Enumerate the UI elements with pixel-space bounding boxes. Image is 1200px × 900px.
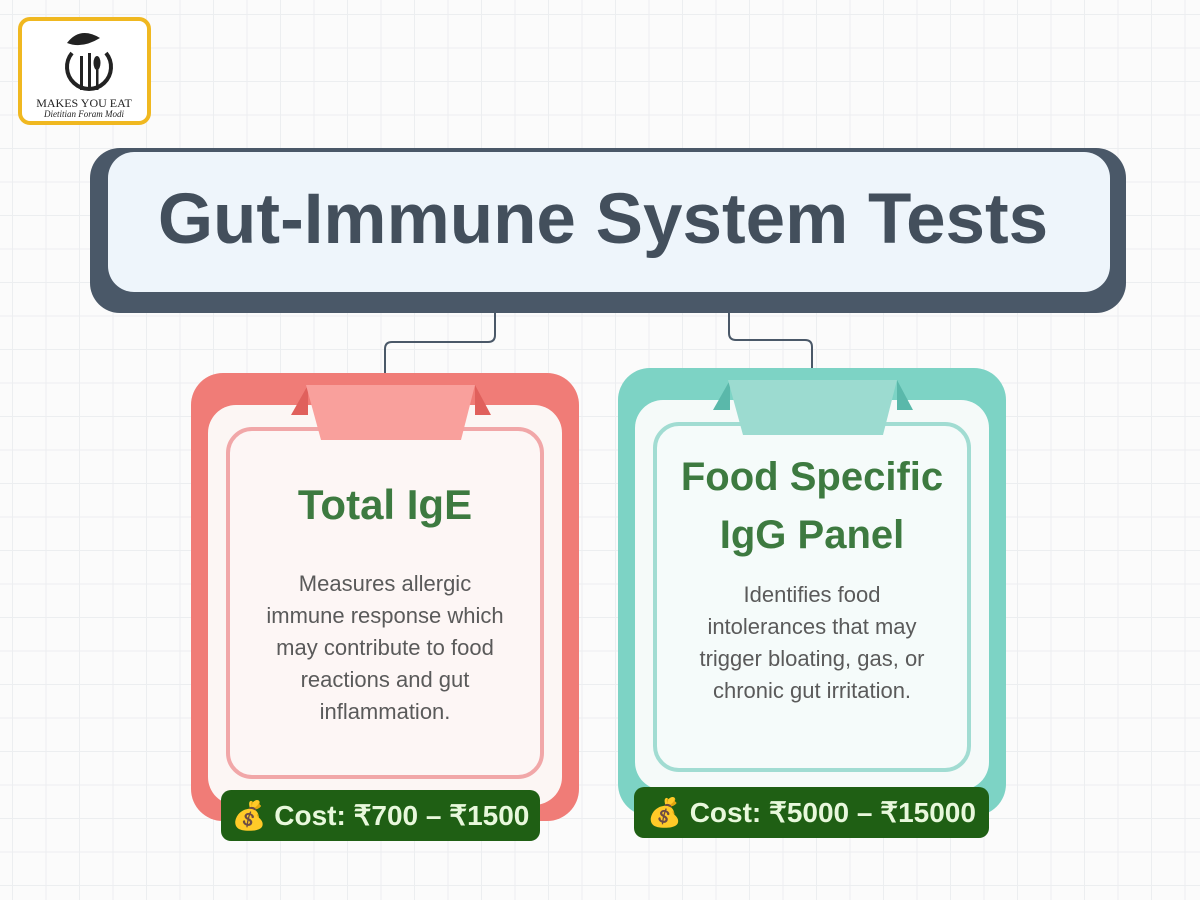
tab bbox=[713, 380, 913, 435]
cost badge left: 💰 Cost: ₹700 – ₹1500 bbox=[232, 800, 529, 831]
tab bbox=[291, 385, 491, 440]
text: Identifies food intolerances that may trigger bloating, gas, or chronic gut irritation. bbox=[699, 582, 925, 703]
logo: MAKES YOU EAT bbox=[36, 96, 132, 110]
title box bbox=[90, 148, 1126, 313]
cost badge right: 💰 Cost: ₹5000 – ₹15000 bbox=[647, 797, 976, 828]
cost badge left bbox=[221, 790, 540, 841]
heading: Total IgE bbox=[298, 481, 472, 528]
panel: Total IgE bbox=[191, 373, 579, 821]
logo bbox=[18, 17, 151, 125]
text: Measures allergic immune response which may contribute to food reactions and gut inflammation. bbox=[266, 571, 504, 724]
title bbox=[108, 152, 1110, 292]
logo: Dietitian Foram Modi bbox=[43, 109, 124, 119]
title: Gut-Immune System Tests bbox=[158, 180, 1048, 258]
cost badge right bbox=[634, 787, 989, 838]
panel: IgG bbox=[618, 368, 1006, 816]
heading: Food Specific IgG Panel bbox=[681, 455, 943, 557]
